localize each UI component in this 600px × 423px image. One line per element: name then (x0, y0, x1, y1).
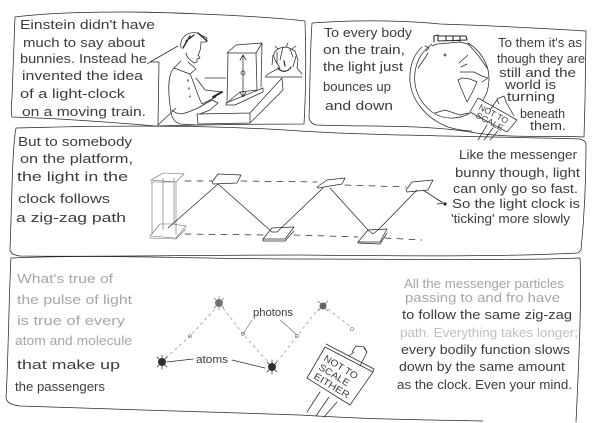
text: world turning caption: To them it's as (498, 35, 582, 50)
diagram: atoms and photons path (157, 296, 354, 374)
text: Einstein caption: on a moving train. (22, 104, 146, 119)
text: pulse of light caption: is true of every (17, 313, 126, 328)
label: atoms: atoms (196, 354, 229, 366)
text: Einstein caption: Einstein didn't have (20, 17, 155, 32)
text: messenger bunny caption (451, 147, 581, 226)
text: Einstein caption: bunnies. Instead he (20, 51, 147, 66)
icon: not to scale sign (470, 96, 517, 140)
text: pulse of light caption (15, 271, 132, 394)
text: world turning caption: though they are (497, 51, 585, 66)
text: platform caption: clock follows (18, 191, 111, 206)
icon: Einstein at table (147, 33, 302, 125)
icon: atoms (157, 296, 328, 374)
text: pulse of light caption: the pulse of light (17, 292, 132, 307)
text: messenger particles caption: to follow the same zig-zag (402, 307, 572, 322)
label: atoms (167, 354, 265, 368)
text: messenger particles caption: path. Everything takes longer; (400, 325, 578, 340)
text: train caption (323, 25, 413, 113)
text: messenger bunny caption: Like the messenger (459, 147, 578, 162)
icon: not to scale either sign (307, 344, 374, 417)
icon: bunny on shelf (265, 43, 302, 77)
text: Einstein caption: invented the idea (22, 68, 144, 83)
text: messenger particles caption: passing to and fro have (405, 290, 560, 305)
panel: Einstein and the light clock (11, 12, 306, 126)
text: messenger particles caption (397, 276, 578, 392)
text: platform caption: But to somebody (18, 134, 133, 149)
text: Einstein caption: of a light-clock (20, 86, 126, 101)
text: train caption: and down (325, 98, 393, 113)
icon: globe with train (410, 35, 489, 131)
text: pulse of light caption: that make up (17, 357, 120, 372)
text: pulse of light caption: the passengers (15, 379, 105, 394)
text: train caption: bounces up (323, 79, 391, 94)
text: messenger bunny caption: 'ticking' more slowly (451, 211, 571, 226)
text: Einstein caption: much to say about (23, 35, 145, 50)
icon: not to scale either sign: NOT TO (321, 353, 360, 382)
text: platform caption: on the platform, (20, 151, 133, 166)
icon: photons (188, 328, 354, 338)
label: photons (243, 307, 297, 335)
icon: not to scale sign: SCALE (474, 110, 506, 133)
icon: not to scale sign: NOT TO (477, 102, 510, 126)
text: messenger particles caption: every bodily function slows (401, 342, 571, 357)
text: world turning caption: turning (507, 89, 555, 104)
text: messenger particles caption: All the messenger particles (404, 276, 565, 291)
text: platform caption: the light in the (17, 169, 128, 184)
text: messenger bunny caption: can only go so fast. (453, 181, 578, 196)
icon: not to scale either sign: EITHER (311, 371, 352, 401)
text: train caption: To every body (324, 25, 413, 40)
text: world turning caption: world is (504, 77, 557, 92)
text: messenger particles caption: down by the same amount (399, 359, 565, 374)
label: photons: photons (253, 307, 293, 319)
text: messenger particles caption: as the clock. Even your mind. (397, 377, 572, 392)
text: world turning caption (497, 35, 585, 133)
icon: not to scale either sign: SCALE (316, 362, 351, 389)
text: messenger bunny caption: bunny though, light (455, 165, 580, 180)
text: messenger bunny caption: So the light clock is (452, 196, 581, 211)
text: platform caption (16, 134, 133, 225)
panel: atoms and molecules (6, 256, 581, 422)
text: pulse of light caption: What's true of (17, 271, 113, 286)
text: pulse of light caption: atom and molecule (15, 333, 132, 348)
diagram: zig-zag light clock (150, 173, 447, 244)
text: world turning caption: them. (530, 118, 566, 133)
icon: light clock box (226, 43, 263, 105)
panel: everybody on the train (309, 21, 586, 140)
panel: zig-zag path (10, 126, 586, 256)
text: platform caption: a zig-zag path (16, 210, 126, 225)
text: train caption: the light just (323, 59, 403, 74)
text: train caption: on the train, (323, 42, 405, 57)
text: world turning caption: beneath (520, 106, 565, 121)
text: Einstein caption (20, 17, 155, 119)
text: world turning caption: still and the (499, 65, 576, 80)
